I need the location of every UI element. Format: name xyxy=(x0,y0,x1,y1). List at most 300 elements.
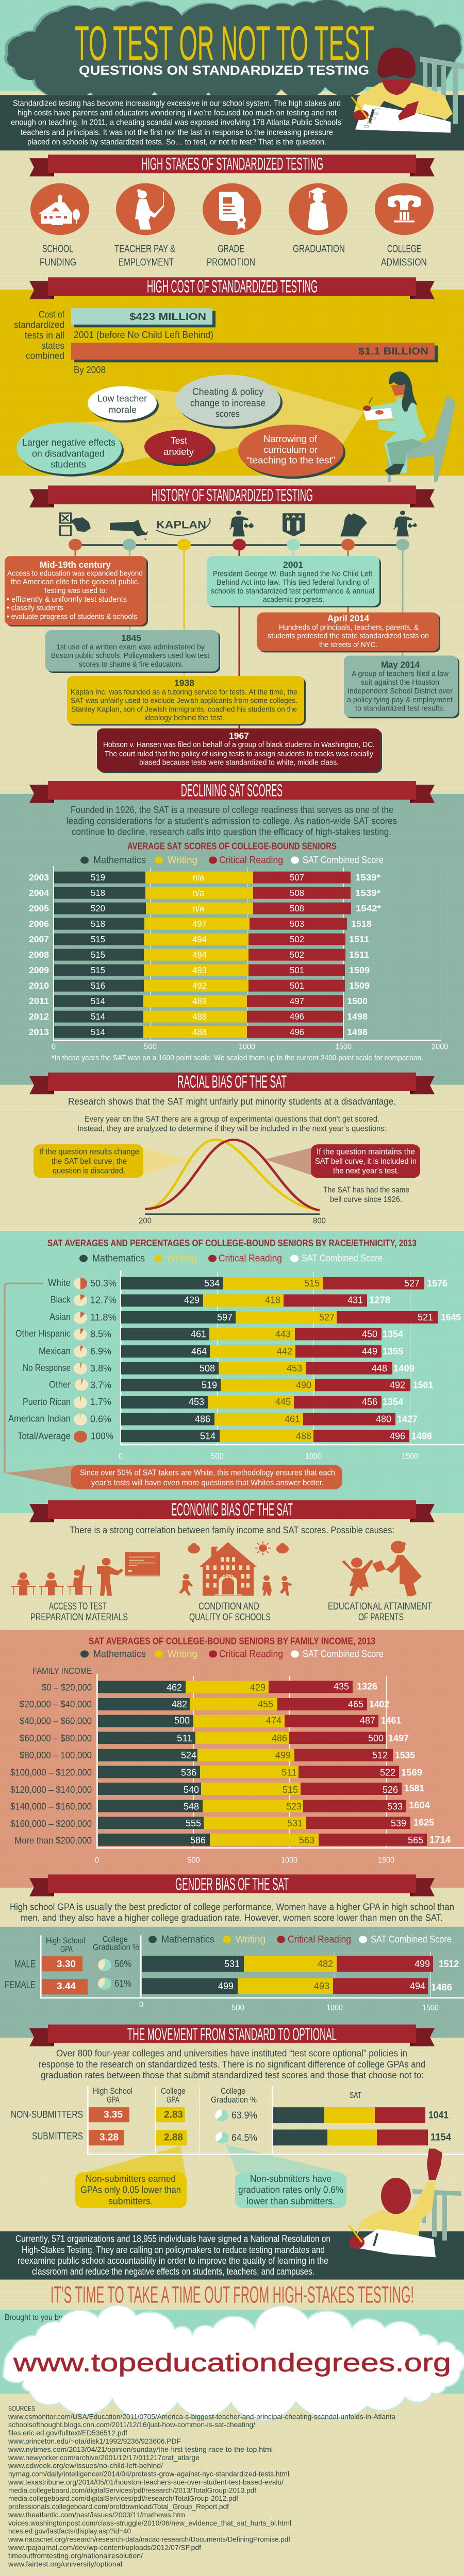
chart: bell curves: 800 xyxy=(313,1216,326,1225)
row: Total/Average: 1498 xyxy=(411,1431,432,1442)
callout: question discarded: the SAT bell curve, the xyxy=(52,1157,127,1166)
row: 2008 xyxy=(29,949,369,961)
item: graduation xyxy=(289,183,347,255)
row: 2013: 496 xyxy=(290,1027,304,1037)
item: teacher pay: EMPLOYMENT xyxy=(119,256,174,268)
row: 2011: 1500 xyxy=(347,996,368,1006)
row: $80,000 – 100,000 xyxy=(20,1749,415,1761)
text: SAT intro: continue to decline, research calls into question the efficacy of high-stakes testing. xyxy=(72,827,391,837)
closing band: Currently, 571 organizations and 18,955 individuals have signed a National Resolution on xyxy=(15,2234,330,2244)
row: 2006: 503 xyxy=(290,919,304,929)
section banner: high cost xyxy=(29,277,435,299)
row: $100,000 – $120,000: 522 xyxy=(380,1767,395,1778)
legend: race chart: SAT Combined Score xyxy=(302,1253,383,1264)
row: More than $200,000: More than $200,000 xyxy=(14,1836,92,1846)
bar: 2001 cost xyxy=(71,308,216,341)
row: Total/Average: 488 xyxy=(296,1431,311,1442)
axis labels: 1500 xyxy=(402,1452,418,1461)
row: 2003: 2003 xyxy=(29,872,49,883)
timeline box: mid-19th century: • evaluate progress of students & schools xyxy=(7,612,137,621)
legend: race chart xyxy=(79,1253,383,1264)
row: $120,000 – $140,000: 540 xyxy=(184,1785,199,1795)
row: White: 534 xyxy=(204,1278,220,1289)
row: No Response: 448 xyxy=(372,1363,387,1374)
bubble: narrowing: Narrowing of xyxy=(263,434,317,445)
row: Puerto Rican: 1354 xyxy=(383,1397,403,1408)
row: $40,000 – $60,000 xyxy=(20,1715,401,1727)
axis labels xyxy=(95,1855,394,1865)
item: grade promotion: GRADE xyxy=(218,243,244,255)
row: female: 3.44 xyxy=(57,1981,76,1992)
axis labels: 500 xyxy=(231,2003,244,2012)
icon: ballot and hand xyxy=(60,513,91,535)
row: submitters: 2.88 xyxy=(164,2132,183,2143)
sources: www.newyorker.com/archive/2001/12/17/011217crat_atlarge xyxy=(8,2454,200,2462)
row: $140,000 – $160,000: 548 xyxy=(184,1802,199,1812)
timeline box: 2001: schools to standardized test performance & annual xyxy=(211,587,374,596)
timeline box: 1938: SAT was unfairly used to exclude Jewish applicants from some colleges. xyxy=(71,696,297,705)
row: Other Hispanic: Other Hispanic xyxy=(15,1329,71,1339)
row: 2005: n/a xyxy=(193,903,204,913)
row: $20,000 – $40,000: $20,000 – $40,000 xyxy=(20,1699,92,1710)
text: cause labels xyxy=(30,1601,432,1623)
row: Black: 1278 xyxy=(369,1295,390,1306)
note: same bell curve xyxy=(323,1185,409,1204)
bubble: larger negative effects xyxy=(16,422,124,477)
row: 2004: 518 xyxy=(91,888,105,898)
row: $0 – $20,000: 462 xyxy=(167,1682,182,1693)
row: 2004: 2004 xyxy=(29,888,49,898)
row: 2006: 518 xyxy=(91,919,105,929)
axis labels: 500 xyxy=(144,1042,157,1051)
row: 2013: 2013 xyxy=(29,1027,49,1037)
axis labels: 1000 xyxy=(239,1042,255,1051)
row: Puerto Rican: 453 xyxy=(189,1397,204,1408)
panel: cost bars xyxy=(14,308,438,376)
legend: income chart: SAT Combined Score xyxy=(303,1649,384,1659)
timeline box: 1938: ideology behind the test. xyxy=(144,714,224,722)
timeline line and stems xyxy=(74,544,403,728)
row: Mexican: 464 xyxy=(191,1346,207,1357)
row: male xyxy=(14,1956,459,1972)
row: White: 527 xyxy=(404,1278,420,1289)
row: non-submitters: 3.35 xyxy=(104,2109,123,2120)
row: $160,000 – $200,000: 555 xyxy=(186,1818,201,1829)
row: female xyxy=(5,1978,452,1994)
item: grade promotion xyxy=(203,183,261,268)
callout: non-submitters graduation: Non-submitters have xyxy=(250,2174,332,2184)
row: 2010: 1509 xyxy=(349,980,370,991)
subtitle: QUESTIONS ON STANDARDIZED TESTING xyxy=(79,63,369,78)
row: $0 – $20,000: $0 – $20,000 xyxy=(42,1682,92,1693)
row: Black: 429 xyxy=(184,1295,200,1306)
row: 2007 xyxy=(29,934,369,945)
closing band: High-Stakes Testing. They are calling on policymakers to reduce testing mandates and xyxy=(22,2245,325,2256)
row: $60,000 – $80,000: 1497 xyxy=(388,1733,409,1744)
callout: question included xyxy=(311,1144,420,1178)
axis labels: 1000 xyxy=(281,1855,297,1865)
callout: question included: If the question maintains the xyxy=(317,1147,415,1156)
legend: gender chart: Critical Reading xyxy=(288,1934,351,1945)
row: 2011: 514 xyxy=(91,996,105,1006)
row: 2005: 1542* xyxy=(356,903,382,913)
section banner: history xyxy=(29,485,435,507)
row: 2010: 516 xyxy=(91,980,105,991)
row: $20,000 – $40,000: 1402 xyxy=(369,1699,389,1710)
row: Puerto Rican: 445 xyxy=(275,1397,291,1408)
row: $80,000 – 100,000: 499 xyxy=(275,1750,291,1760)
row: 2004: 508 xyxy=(290,888,304,898)
icon: classroom xyxy=(11,1552,160,1596)
item: college admission xyxy=(375,183,434,268)
row: 2004: n/a xyxy=(193,888,204,898)
row: 2012: 514 xyxy=(91,1011,105,1022)
row: 2009: 493 xyxy=(192,965,207,975)
row: 2011: 2011 xyxy=(29,996,49,1006)
section banner: gender bias: GENDER BIAS OF THE SAT xyxy=(175,1874,289,1894)
legend: race chart: Mathematics xyxy=(92,1253,145,1264)
section banner: economic bias xyxy=(29,1500,435,1522)
bar: 2008 cost: By 2008 xyxy=(74,365,106,376)
row: 2003: 1539* xyxy=(355,872,381,883)
row: male: 56% xyxy=(114,1959,131,1970)
row: Black xyxy=(51,1294,390,1307)
row: $40,000 – $60,000: 487 xyxy=(360,1716,375,1726)
row: Asian: 11.8% xyxy=(90,1312,117,1323)
row: submitters: 1154 xyxy=(430,2132,451,2143)
row: 2003: 507 xyxy=(290,872,304,883)
illustration: student raising hand xyxy=(348,2148,461,2257)
column headers: Graduation % xyxy=(211,2095,257,2105)
text: gender intro xyxy=(10,1902,454,1923)
bubble: narrowing xyxy=(238,425,345,479)
timeline box: 1938 xyxy=(67,676,306,725)
timeline box: 1845: 1845 xyxy=(121,633,141,643)
chart: family income xyxy=(10,1674,464,1865)
axis labels: 1500 xyxy=(378,1855,394,1865)
row: Mexican: 6.9% xyxy=(90,1346,111,1357)
row: Asian xyxy=(49,1311,461,1324)
row: Total/Average: 496 xyxy=(390,1431,405,1442)
row: Mexican: 442 xyxy=(277,1346,292,1357)
bubble: larger negative effects: students xyxy=(51,460,86,470)
timeline box: April 2014: Hundreds of principals, teachers, parents, & xyxy=(279,623,419,632)
row: submitters: SUBMITTERS xyxy=(32,2131,83,2142)
sources: www.nytimes.com/2013/04/21/opinion/sunday/the-first-testing-race-to-the-top.html xyxy=(8,2446,273,2454)
bubble: narrowing: curriculum or xyxy=(263,445,318,455)
item: school funding xyxy=(30,183,89,268)
row: 2005: 520 xyxy=(91,903,105,913)
row: $40,000 – $60,000: 1461 xyxy=(381,1716,401,1726)
row: 2009: 2009 xyxy=(29,965,49,975)
icon: parent and child xyxy=(342,1541,422,1596)
chart heading: average SAT scores: AVERAGE SAT SCORES OF COLLEGE-BOUND SENIORS xyxy=(127,841,337,852)
row: $60,000 – $80,000: 511 xyxy=(177,1733,192,1744)
website URL: www.topeducationdegrees.org xyxy=(13,2349,451,2377)
row: American Indian: 0.6% xyxy=(90,1414,111,1425)
row: Other: 490 xyxy=(296,1380,311,1391)
text: cost label: tests in all xyxy=(25,330,64,341)
column headers: High School xyxy=(93,2086,132,2096)
section banner: racial bias xyxy=(29,1072,435,1094)
text: racial bias intro xyxy=(68,1096,396,1133)
illustration: girl at desk xyxy=(363,371,456,482)
row: 2008: 494 xyxy=(192,950,207,960)
intro band: high costs have parents and educators wondering if we’re focused too much on testing and not xyxy=(18,108,337,117)
sources xyxy=(8,2404,396,2568)
icon: Massachusetts xyxy=(110,520,148,540)
axis labels: 2000 xyxy=(432,1042,448,1051)
row: $140,000 – $160,000: 533 xyxy=(387,1802,403,1812)
callout: over 50% white xyxy=(71,1465,342,1489)
row: No Response: No Response xyxy=(23,1363,71,1374)
row: non-submitters: 1041 xyxy=(428,2109,449,2121)
timeline box: mid-19th century: Testing was used to: xyxy=(43,586,107,595)
row: 2008: 2008 xyxy=(29,950,49,960)
row: Total/Average: 100% xyxy=(91,1431,113,1442)
callout: question discarded xyxy=(34,1144,143,1178)
timeline box: mid-19th century: • efficiently & uniformly test students xyxy=(7,595,127,603)
row: $100,000 – $120,000: 511 xyxy=(281,1767,297,1778)
item: grade promotion: PROMOTION xyxy=(207,256,255,268)
row: More than $200,000: 586 xyxy=(190,1835,206,1845)
illustration: boy taking test xyxy=(351,48,464,150)
text: cost label: Cost of xyxy=(39,309,64,320)
row: non-submitters xyxy=(11,2107,449,2123)
axis labels xyxy=(119,1452,418,1461)
chart: submitters table xyxy=(11,2086,464,2155)
sources: nces.ed.gov/fastfacts/display.asp?id=40 xyxy=(8,2528,131,2535)
row: Puerto Rican: Puerto Rican xyxy=(23,1397,71,1408)
row: 2006 xyxy=(29,918,372,930)
row: 2013: 488 xyxy=(192,1027,207,1037)
text: movement intro xyxy=(39,2048,425,2081)
row: 2007: 502 xyxy=(290,934,304,944)
intro band: enough on teaching. In 2011, a cheating scandal was exposed involving 178 Atlanta Public Schools’ xyxy=(11,117,343,127)
bubble: narrowing: “teaching to the test” xyxy=(246,455,335,466)
row: More than $200,000: 563 xyxy=(299,1835,314,1845)
sources: www.princeton.edu/~ota/disk1/1992/9236/923606.PDF xyxy=(8,2437,181,2446)
row: $160,000 – $200,000: $160,000 – $200,000 xyxy=(10,1819,92,1829)
callout: non-submitters GPA: submitters. xyxy=(108,2196,153,2207)
item: graduation: GRADUATION xyxy=(293,243,345,255)
row: 2012: 1498 xyxy=(347,1011,368,1022)
row: White: 50.3% xyxy=(90,1278,117,1289)
item: school funding: SCHOOL xyxy=(42,243,73,255)
bubble: cheating: change to increase xyxy=(190,398,266,409)
row: $120,000 – $140,000 xyxy=(10,1783,424,1795)
timeline box: 1938: Kaplan Inc. was founded as a tutoring service for tests. At the time, the xyxy=(71,688,297,697)
row: female: 493 xyxy=(314,1981,329,1992)
bar: 2008 cost xyxy=(71,343,438,376)
row: White: 515 xyxy=(304,1278,320,1289)
legend: race chart: Critical Reading xyxy=(219,1253,282,1264)
timeline box: mid-19th century: the American elite to the general public. xyxy=(11,578,140,586)
text: cost label: standardized xyxy=(14,320,64,330)
row: 2011 xyxy=(29,995,368,1007)
timeline box: 1845: scores to shame & fire educators. xyxy=(79,660,184,669)
timeline box: 2001: Behind Act into law. This tied federal funding of xyxy=(217,578,369,587)
callout: over 50% white: year’s tests will have even more questions that Whites answer better. xyxy=(91,1478,324,1487)
callout: non-submitters graduation: graduation rates only 0.6% xyxy=(238,2185,343,2195)
row: 2012: 488 xyxy=(192,1011,207,1022)
row: 2006: 2006 xyxy=(29,919,49,929)
row: non-submitters: 2.83 xyxy=(164,2109,183,2120)
row: 2003: 519 xyxy=(91,872,105,883)
row: $60,000 – $80,000: $60,000 – $80,000 xyxy=(20,1733,92,1744)
row: $160,000 – $200,000: 1625 xyxy=(413,1817,434,1828)
row: No Response: 508 xyxy=(200,1363,215,1374)
row: Black: Black xyxy=(51,1295,71,1305)
row: More than $200,000: 1714 xyxy=(429,1835,451,1845)
text: cost label xyxy=(14,309,64,361)
row: $160,000 – $200,000: 531 xyxy=(287,1818,303,1829)
row: 2012 xyxy=(29,1011,368,1023)
sources: professionals.collegeboard.com/profdownload/Total_Group_Report.pdf xyxy=(8,2503,229,2511)
column headers: Graduation % xyxy=(93,1942,139,1952)
row: $80,000 – 100,000: 512 xyxy=(372,1750,388,1760)
icon: justice figure xyxy=(229,511,254,536)
column headers: GPA xyxy=(60,1944,73,1954)
axis labels: 1000 xyxy=(305,1452,322,1461)
row: 2005 xyxy=(29,903,382,914)
row: 2005: 508 xyxy=(290,903,304,913)
row: No Response xyxy=(23,1362,415,1375)
timeline box: mid-19th century: Mid-19th century xyxy=(40,560,111,570)
panel: high stakes items xyxy=(30,183,434,268)
row: Other: 1501 xyxy=(413,1380,433,1391)
column headers: College xyxy=(221,2086,245,2096)
row: $40,000 – $60,000: $40,000 – $60,000 xyxy=(20,1716,92,1726)
row: 2005: 2005 xyxy=(29,903,49,913)
row: 2011: 489 xyxy=(192,996,207,1006)
row: American Indian: 1427 xyxy=(397,1414,418,1425)
row: Puerto Rican xyxy=(23,1396,403,1409)
note: same bell curve: bell curve since 1926. xyxy=(330,1195,402,1204)
bubble: test anxiety xyxy=(144,430,216,466)
row: 2004 xyxy=(29,887,381,899)
section banner: declining SAT scores: DECLINING SAT SCORES xyxy=(181,781,283,800)
axis labels: 1500 xyxy=(335,1042,352,1051)
row: 2009 xyxy=(29,964,370,976)
sources: www.theatlantic.com/past/issues/2003/11/mathews.htm xyxy=(8,2511,185,2519)
row: 2010: 492 xyxy=(192,980,207,991)
closing band: reexamine public school accountability in order to improve the quality of learning in the xyxy=(18,2256,328,2266)
row: White: White xyxy=(48,1278,71,1289)
timeline box: mid-19th century: • classify students xyxy=(7,603,63,612)
row: $120,000 – $140,000: 1581 xyxy=(404,1783,424,1794)
row: No Response: 3.8% xyxy=(90,1363,111,1374)
row: male: 1512 xyxy=(439,1959,459,1970)
row: submitters xyxy=(32,2129,451,2145)
row: $0 – $20,000 xyxy=(42,1681,377,1693)
icon: school xyxy=(179,1541,292,1596)
row: Mexican: 1355 xyxy=(383,1346,403,1357)
row: male: 531 xyxy=(224,1959,240,1970)
text: cause labels: PREPARATION MATERIALS xyxy=(30,1612,128,1623)
row: Asian: 597 xyxy=(217,1312,233,1323)
row: 2011: 497 xyxy=(290,996,304,1006)
row: Total/Average: 514 xyxy=(200,1431,216,1442)
closing band: classroom and reduce the negative effects on students, teachers, and campuses. xyxy=(32,2266,314,2277)
section banner: declining SAT scores xyxy=(29,781,435,803)
row: American Indian xyxy=(8,1413,418,1426)
row: $160,000 – $200,000 xyxy=(10,1817,434,1829)
row: submitters: 3.28 xyxy=(100,2132,119,2143)
row: Other Hispanic: 8.5% xyxy=(90,1329,111,1340)
column headers: College xyxy=(103,1934,128,1944)
row: More than $200,000 xyxy=(14,1834,451,1846)
intro band: teachers and principals. It was not the first nor the last in response to the increasing pressure xyxy=(21,128,333,137)
text: racial bias intro: Instead, they are analyzed to determine if they will be included in the next year’s questions: xyxy=(77,1124,387,1133)
row: $80,000 – 100,000: 1535 xyxy=(395,1750,415,1760)
row: $140,000 – $160,000: 523 xyxy=(286,1802,302,1812)
axis labels xyxy=(52,1042,448,1051)
timeline box: 1845: Boston public schools. Policymakers used low test xyxy=(51,651,209,660)
bubble: cheating: Cheating & policy xyxy=(192,386,263,397)
item: college admission: ADMISSION xyxy=(381,256,427,268)
row: Asian: 521 xyxy=(418,1312,433,1323)
row: $80,000 – 100,000: $80,000 – 100,000 xyxy=(20,1750,92,1760)
illustration rays xyxy=(69,375,364,474)
icon: school: SCHOOL xyxy=(220,1573,236,1578)
legend: gender chart xyxy=(148,1934,452,1945)
row: $100,000 – $120,000 xyxy=(10,1766,422,1778)
timeline box: 1938: 1938 xyxy=(174,678,194,688)
timeline box: April 2014: April 2014 xyxy=(327,613,369,623)
row: Other xyxy=(49,1379,433,1391)
wedge: yellow callout pointer xyxy=(80,2146,186,2174)
row: 2004: 1539* xyxy=(355,888,381,898)
legend: income chart: Critical Reading xyxy=(219,1649,283,1659)
timeline box: May 2014: to standardized test results. xyxy=(355,704,445,713)
row: Asian: Asian xyxy=(49,1312,71,1323)
row: 2010: 501 xyxy=(290,980,304,991)
callout: non-submitters GPA xyxy=(75,2172,187,2208)
timeline box: 1967: The court ruled that the policy of using tests to assign students to tracks was racially xyxy=(105,750,373,758)
callout: non-submitters GPA: GPAs only 0.05 lower than xyxy=(80,2185,181,2195)
timeline box: 1967: biased because tests were standardized to white, middle class. xyxy=(139,758,339,767)
timeline box: mid-19th century: Access to education was expanded beyond xyxy=(7,569,143,578)
note: same bell curve: The SAT has had the same xyxy=(323,1185,409,1194)
row: Puerto Rican: 1.7% xyxy=(90,1397,111,1408)
row: American Indian: American Indian xyxy=(8,1414,71,1424)
text: cause labels: OF PARENTS xyxy=(358,1612,404,1623)
column headers: GPA xyxy=(107,2095,120,2105)
row: $100,000 – $120,000: 536 xyxy=(181,1767,196,1778)
timeline box: May 2014: suit against the Houston xyxy=(361,678,439,687)
row: Black: 431 xyxy=(347,1295,363,1306)
row: $140,000 – $160,000 xyxy=(10,1800,430,1812)
sources: nymag.com/daily/intelligencer/2014/04/protests-grow-against-nyc-standardized-tests.html xyxy=(8,2470,289,2478)
callout: question discarded: If the question results change xyxy=(39,1147,139,1156)
row: Mexican: 449 xyxy=(362,1346,377,1357)
legend: race chart: Writing xyxy=(167,1253,197,1264)
row: male: 3.30 xyxy=(57,1959,76,1970)
legend: income chart xyxy=(80,1649,384,1659)
timeline box: mid-19th century xyxy=(5,556,148,626)
row: American Indian: 461 xyxy=(285,1414,300,1425)
legend: declining chart xyxy=(80,855,384,866)
legend: declining chart: Critical Reading xyxy=(219,855,283,866)
callout: question included: SAT bell curve, it is included in xyxy=(315,1157,417,1166)
row: 2010 xyxy=(29,980,370,992)
row: More than $200,000: 565 xyxy=(408,1835,423,1845)
text: cause labels: QUALITY OF SCHOOLS xyxy=(189,1612,271,1623)
row: $20,000 – $40,000: 482 xyxy=(172,1699,187,1710)
row: 2009: 515 xyxy=(91,965,105,975)
brought to you by: Brought to you by xyxy=(5,2313,62,2322)
